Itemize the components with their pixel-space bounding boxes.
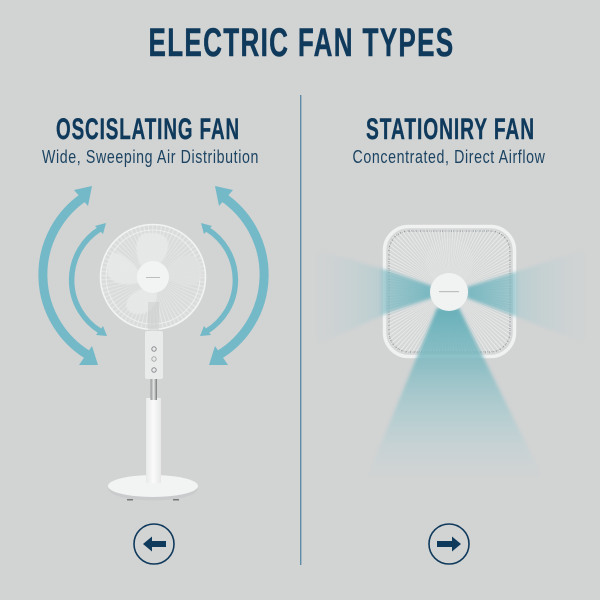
left subheading: Wide, Sweeping Air Distribution <box>42 146 259 167</box>
stationary box fan <box>384 226 514 356</box>
fan frame <box>384 226 514 356</box>
airflow beam: right <box>467 248 598 345</box>
icon: left arrow <box>134 524 174 564</box>
sweep arrows: left side <box>43 186 107 365</box>
fan hub <box>137 261 169 293</box>
center divider <box>300 95 301 565</box>
metal pole <box>150 378 157 400</box>
sweep arrows: right side <box>200 186 264 365</box>
fan grille <box>400 238 500 342</box>
fan base <box>108 475 198 500</box>
neck guard <box>148 302 159 330</box>
fan head <box>100 224 206 330</box>
airflow beam: down <box>367 308 543 478</box>
oscillating pedestal fan <box>100 224 206 500</box>
left heading: OSCISLATING FAN <box>56 113 240 146</box>
right subheading: Concentrated, Direct Airflow <box>352 146 546 167</box>
lower pole <box>146 398 161 483</box>
control housing <box>145 331 163 379</box>
airflow beam: left <box>306 250 432 345</box>
icon: right arrow <box>429 524 469 564</box>
fan blades <box>107 233 202 314</box>
fan hub: box fan <box>430 273 468 311</box>
